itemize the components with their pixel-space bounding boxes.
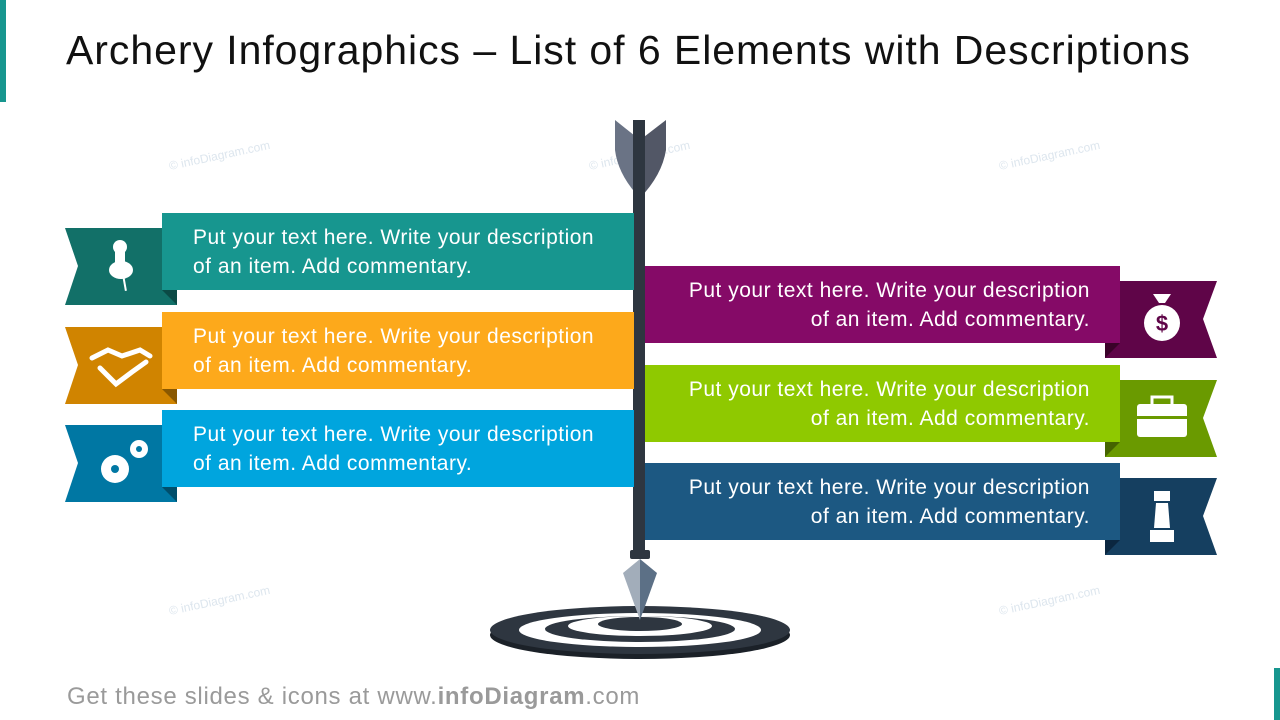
watermarks: © infoDiagram.com	[588, 138, 691, 173]
text: right 1	[689, 279, 1090, 331]
text: left 1: Put your text here. Write your description	[193, 226, 594, 249]
text: left 3	[193, 423, 594, 475]
right banners	[645, 266, 1217, 555]
text: left 2: Put your text here. Write your description	[193, 325, 594, 348]
target	[490, 606, 790, 659]
text: right 2	[689, 378, 1090, 430]
icon: rook	[1150, 491, 1174, 542]
corner accent	[1274, 668, 1280, 720]
text: right 1: of an item. Add commentary.	[811, 308, 1090, 331]
title: Archery Infographics – List of 6 Elements with Descriptions	[66, 27, 1191, 73]
text: left 2: of an item. Add commentary.	[193, 354, 472, 377]
footer: Get these slides & icons at www.infoDiagram.com	[67, 683, 640, 710]
watermarks	[168, 138, 1101, 618]
icon: toolbox	[1137, 397, 1187, 437]
text: left 2	[193, 325, 594, 377]
left banners	[65, 213, 634, 502]
text: right 3: Put your text here. Write your description	[689, 476, 1090, 499]
arrow	[615, 120, 666, 620]
icon: handshake	[92, 350, 150, 384]
icon: pushpin	[109, 240, 133, 291]
watermarks: © infoDiagram.com	[168, 138, 271, 173]
watermarks: © infoDiagram.com	[168, 583, 271, 618]
text: right 3: of an item. Add commentary.	[811, 505, 1090, 528]
text: left 1: of an item. Add commentary.	[193, 255, 472, 278]
watermarks: © infoDiagram.com	[998, 583, 1101, 618]
icon: money bag: $	[1156, 311, 1168, 336]
accent bar	[0, 0, 6, 102]
text: right 3	[689, 476, 1090, 528]
text: left 3: of an item. Add commentary.	[193, 452, 472, 475]
text: left 3: Put your text here. Write your description	[193, 423, 594, 446]
text: right 2: of an item. Add commentary.	[811, 407, 1090, 430]
icon: gears	[101, 440, 148, 483]
icon: money bag	[1144, 294, 1180, 341]
watermarks: © infoDiagram.com	[998, 138, 1101, 173]
text: left 1	[193, 226, 594, 278]
text: right 2: Put your text here. Write your description	[689, 378, 1090, 401]
text: right 1: Put your text here. Write your description	[689, 279, 1090, 302]
